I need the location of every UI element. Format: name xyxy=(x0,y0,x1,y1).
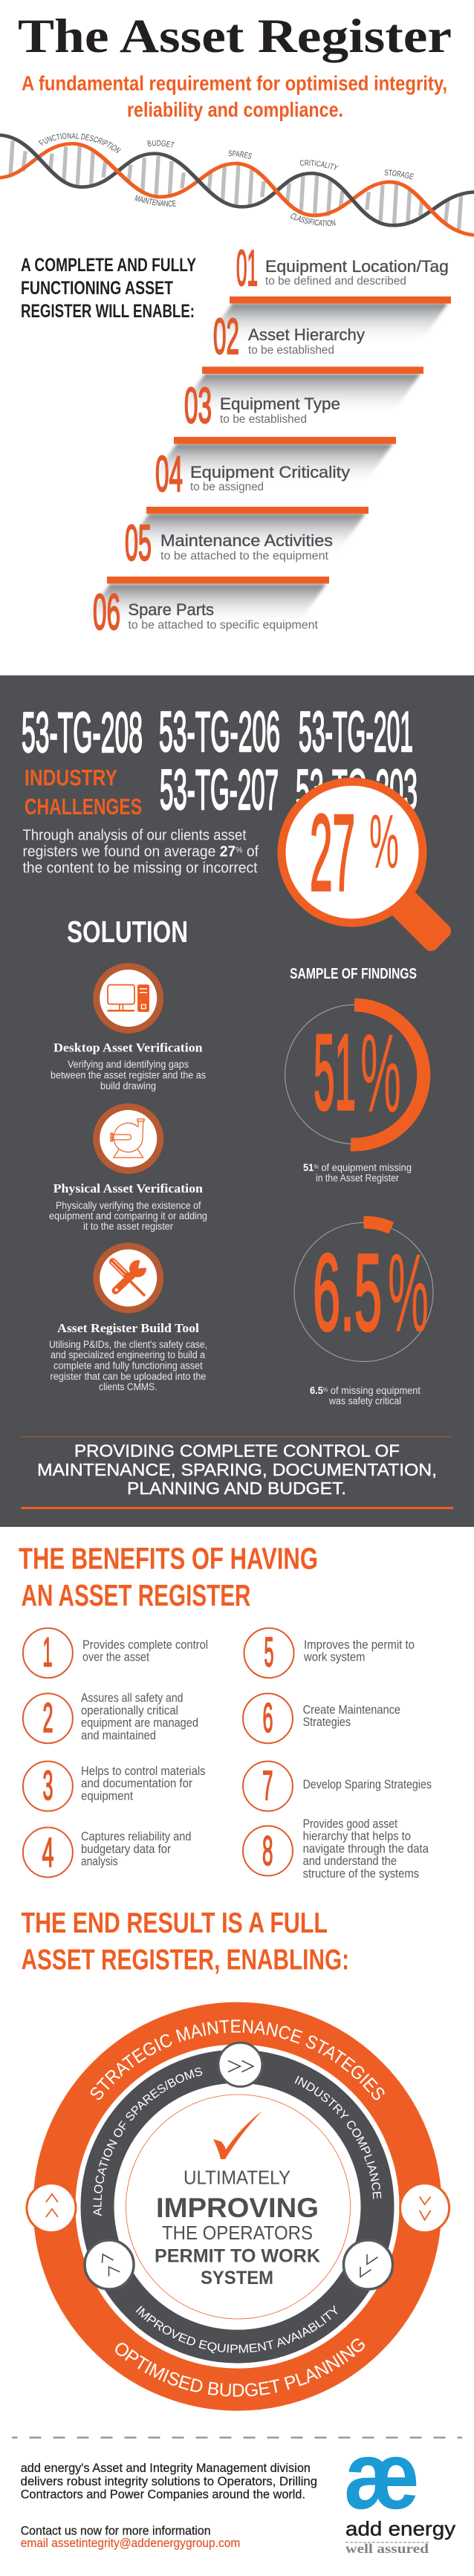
badge: top arrows xyxy=(218,2043,262,2086)
text: asset register build tool: and specialized engineering to build a xyxy=(51,1349,205,1361)
step 03: 03 xyxy=(184,377,212,434)
step 01: 01 xyxy=(236,240,258,296)
benefit 8: structure of the systems xyxy=(303,1866,419,1881)
DNA labels: CLASSIFICATION xyxy=(290,213,336,226)
title: The Asset Register xyxy=(18,10,452,63)
intro heading: A COMPLETE AND FULLY xyxy=(21,255,196,276)
step 05: Maintenance Activities xyxy=(160,531,333,550)
benefit 2: operationally critical xyxy=(81,1703,178,1718)
text: desktop asset verification: Verifying and identifying gaps xyxy=(68,1059,189,1071)
DNA labels: MAINTENANCE xyxy=(134,195,177,207)
benefit 4 xyxy=(23,1828,192,1877)
company description: add energy's Asset and Integrity Management division xyxy=(21,2462,311,2475)
caption: 51 percent: of equipment missing xyxy=(319,1162,412,1174)
benefit 6 xyxy=(243,1693,400,1743)
logo: add energy: æ xyxy=(344,2422,420,2529)
benefit 3: and documentation for xyxy=(81,1777,192,1791)
magnifying glass with 27%: 27 xyxy=(310,792,355,913)
challenge text: the content to be missing or incorrect xyxy=(22,860,258,877)
caption: 6.5 percent xyxy=(310,1385,421,1407)
badge: left arrows xyxy=(27,2184,76,2233)
benefit 4: budgetary data for xyxy=(81,1842,171,1856)
step 04: 04 xyxy=(155,446,183,502)
step 05: 05 xyxy=(125,515,152,571)
icon: wrench and screwdriver xyxy=(97,1246,160,1310)
benefit 5: 5 xyxy=(264,1629,273,1675)
challenge text: registers we found on average 27 xyxy=(22,843,237,860)
center statement: IMPROVING xyxy=(156,2193,319,2223)
chart: 51 percent ring: 51 xyxy=(314,1012,356,1132)
callout: complete control statement: PLANNING AND BUDGET. xyxy=(127,1479,346,1498)
DNA labels xyxy=(39,132,415,226)
challenge text: Through analysis of our clients asset xyxy=(22,827,247,844)
benefit 8: and understand the xyxy=(303,1854,397,1868)
asset tag numbers: 53-TG-208 xyxy=(22,701,143,765)
magnifying glass with 27%: % xyxy=(369,799,399,884)
benefits heading: AN ASSET REGISTER xyxy=(21,1578,251,1612)
chart: 51 percent ring: % xyxy=(360,1010,401,1135)
DNA labels: BUDGET xyxy=(147,140,175,148)
panel: dark challenges and solution xyxy=(0,675,474,1527)
DNA helix diagram xyxy=(0,132,474,237)
DNA labels: FUNCTIONAL DESCRIPTION xyxy=(39,132,122,153)
center statement xyxy=(155,2167,320,2288)
icon: check mark xyxy=(213,2111,262,2159)
text: physical asset verification: Physical Asset Verification xyxy=(53,1181,203,1195)
text: physical asset verification: it to the asset register xyxy=(83,1221,173,1233)
step 01: to be defined and described xyxy=(265,275,406,288)
benefit 5: work system xyxy=(303,1650,366,1664)
benefit 1: Provides complete control xyxy=(82,1638,208,1652)
text: asset register build tool: register that can be uploaded into the xyxy=(51,1371,207,1383)
step 06 xyxy=(93,584,319,640)
step 04 xyxy=(146,446,369,514)
intro heading: FUNCTIONING ASSET xyxy=(21,278,173,299)
DNA labels: CRITICALITY xyxy=(300,160,339,171)
industry challenges heading: INDUSTRY xyxy=(25,765,117,791)
callout: complete control statement: MAINTENANCE, SPARING, DOCUMENTATION, xyxy=(37,1460,437,1479)
step 02: to be established xyxy=(248,344,334,357)
caption: 6.5 percent: of missing equipment xyxy=(328,1385,421,1397)
benefit 3 xyxy=(23,1761,206,1811)
inner ring labels: INDUSTRY COMPLIANCE xyxy=(294,2076,382,2199)
chart: 51 percent ring xyxy=(285,1005,424,1144)
caption: 6.5 percent: % xyxy=(323,1386,328,1393)
icon: pump xyxy=(97,1107,160,1171)
benefit 8: navigate through the data xyxy=(303,1841,429,1855)
text: asset register build tool: clients CMMS. xyxy=(99,1381,158,1393)
subtitle xyxy=(22,72,447,121)
benefit 7: 7 xyxy=(262,1762,273,1808)
benefit 5 xyxy=(244,1628,415,1678)
caption: 51 percent: 51 xyxy=(303,1162,314,1174)
circular diagram xyxy=(25,2002,450,2411)
center statement: ULTIMATELY xyxy=(184,2167,290,2189)
step 02: 02 xyxy=(213,308,239,365)
center statement: THE OPERATORS xyxy=(162,2222,313,2244)
benefit 7 xyxy=(243,1761,432,1811)
text: asset register build tool: complete and fully functioning asset xyxy=(53,1360,203,1372)
DNA labels: SPARES xyxy=(229,150,252,159)
icon: desktop computer xyxy=(97,966,160,1030)
step 04: to be assigned xyxy=(190,481,264,493)
callout: complete control statement xyxy=(21,1436,453,1509)
text: physical asset verification: equipment and comparing it or adding xyxy=(49,1210,207,1222)
benefit 8: Provides good asset xyxy=(303,1817,397,1831)
center statement: SYSTEM xyxy=(201,2268,273,2288)
challenge text: of xyxy=(243,843,259,860)
step 01 xyxy=(230,240,451,303)
outer orange ring xyxy=(54,2023,421,2390)
benefit 2: equipment are managed xyxy=(81,1716,198,1730)
logo: add energy: add energy xyxy=(345,2518,456,2540)
challenge text xyxy=(22,827,259,877)
asset tag numbers xyxy=(22,701,418,822)
company description xyxy=(21,2462,317,2501)
company description: Contractors and Power Companies around the world. xyxy=(21,2488,305,2501)
benefits heading: THE BENEFITS OF HAVING xyxy=(19,1542,318,1576)
text: asset register build tool xyxy=(49,1321,207,1393)
asset tag numbers: 53-TG-206 xyxy=(159,701,280,764)
end result heading: ASSET REGISTER, ENABLING: xyxy=(21,1944,349,1976)
logo: add energy xyxy=(344,2422,456,2556)
inner ring labels: ALLOCATION OF SPARES/BOMS xyxy=(93,2067,202,2216)
inner ring labels: IMPROVED EQUIPMENT AVAIABLITY xyxy=(135,2305,337,2354)
contact details: email assetintegrity@addenergygroup.com xyxy=(21,2537,240,2550)
solution heading: SOLUTION xyxy=(67,915,188,949)
benefit 8 xyxy=(243,1817,429,1881)
text: asset register build tool: Utilising P&IDs, the client's safety case, xyxy=(49,1339,207,1351)
benefits heading xyxy=(19,1542,318,1612)
step 03: to be established xyxy=(220,413,307,426)
caption: 51 percent xyxy=(303,1162,412,1184)
company description: delivers robust integrity solutions to Operators, Drilling xyxy=(21,2475,317,2488)
caption: 51 percent: in the Asset Register xyxy=(316,1172,399,1184)
caption: 6.5 percent: was safety critical xyxy=(328,1395,401,1407)
center statement: PERMIT TO WORK xyxy=(155,2245,320,2266)
dark inner ring xyxy=(97,2066,377,2346)
benefit 2: 2 xyxy=(43,1694,53,1741)
outer ring labels xyxy=(91,2019,385,2397)
inner ring labels xyxy=(93,2067,382,2354)
outer ring labels: STRATEGIC MAINTENANCE STATEGIES xyxy=(91,2019,385,2100)
benefit 6: 6 xyxy=(263,1694,273,1741)
benefit 7: Develop Sparing Strategies xyxy=(303,1777,432,1791)
challenge text: % xyxy=(236,846,243,855)
text: desktop asset verification: between the asset register and the as xyxy=(51,1070,206,1082)
intro heading: REGISTER WILL ENABLE: xyxy=(21,301,195,322)
center disc xyxy=(126,2095,351,2319)
text: physical asset verification: Physically verifying the existence of xyxy=(56,1200,201,1212)
benefit 4: analysis xyxy=(81,1855,118,1869)
text: desktop asset verification: build drawing xyxy=(100,1080,156,1092)
step 05 xyxy=(107,515,333,584)
benefit 3: Helps to control materials xyxy=(81,1764,206,1778)
sample of findings heading: SAMPLE OF FINDINGS xyxy=(290,966,417,982)
step shadows xyxy=(80,303,448,626)
benefit 1: over the asset xyxy=(82,1650,149,1664)
step 06: 06 xyxy=(93,584,120,640)
contact details xyxy=(21,2525,240,2550)
benefit 2: Assures all safety and xyxy=(81,1691,183,1705)
benefit 2 xyxy=(23,1691,198,1743)
benefit 3: 3 xyxy=(43,1762,53,1808)
contact details: Contact us now for more information xyxy=(21,2525,211,2538)
DNA labels: STORAGE xyxy=(385,169,415,180)
benefit 4: 4 xyxy=(42,1829,53,1875)
magnifying glass with 27% xyxy=(282,782,454,954)
benefit 4: Captures reliability and xyxy=(81,1829,192,1843)
benefit 3: equipment xyxy=(81,1789,133,1803)
step 02 xyxy=(202,308,423,374)
text: physical asset verification xyxy=(49,1181,207,1233)
step 04: Equipment Criticality xyxy=(190,463,350,481)
callout: complete control statement: PROVIDING COMPLETE CONTROL OF xyxy=(74,1441,400,1461)
benefit 6: Strategies xyxy=(303,1715,351,1729)
benefit 2: and maintained xyxy=(81,1728,156,1742)
industry challenges heading xyxy=(25,765,142,820)
benefit 5: Improves the permit to xyxy=(304,1638,415,1652)
step 02: Asset Hierarchy xyxy=(248,325,365,344)
subtitle: reliability and compliance. xyxy=(127,98,343,121)
text: desktop asset verification: Desktop Asset Verification xyxy=(53,1041,203,1055)
benefit 6: Create Maintenance xyxy=(303,1703,400,1717)
caption: 51 percent: % xyxy=(314,1164,319,1170)
intro heading xyxy=(21,255,196,322)
benefit 1: 1 xyxy=(43,1629,52,1675)
benefit 8: 8 xyxy=(262,1827,273,1874)
DNA rungs xyxy=(10,140,461,230)
footer divider xyxy=(12,2436,462,2439)
benefit 8: hierarchy that helps to xyxy=(303,1829,411,1843)
text: asset register build tool: Asset Register Build Tool xyxy=(57,1321,199,1335)
DNA strands xyxy=(0,135,474,236)
step 03 xyxy=(174,377,396,444)
chart: 6.5 percent ring xyxy=(294,1222,433,1361)
caption: 6.5 percent: 6.5 xyxy=(310,1385,323,1397)
step 06: to be attached to specific equipment xyxy=(128,619,319,632)
end result heading: THE END RESULT IS A FULL xyxy=(21,1907,328,1939)
badge: lower left arrows xyxy=(85,2240,134,2289)
end result heading xyxy=(21,1907,349,1976)
logo: add energy: well assured xyxy=(345,2541,429,2556)
chart: 6.5 percent ring: 6.5 xyxy=(313,1232,382,1354)
step 03: Equipment Type xyxy=(220,395,340,413)
industry challenges heading: CHALLENGES xyxy=(25,794,142,820)
text: desktop asset verification xyxy=(51,1041,206,1092)
badge: right arrows xyxy=(400,2184,449,2233)
step 01: Equipment Location/Tag xyxy=(265,257,449,276)
badge: lower right arrows xyxy=(343,2240,392,2289)
step 06: Spare Parts xyxy=(128,600,214,619)
asset tag numbers: 53-TG-207 xyxy=(160,759,279,822)
step 05: to be attached to the equipment xyxy=(160,550,329,562)
outer ring labels: OPTIMISED BUDGET PLANNING xyxy=(115,2339,365,2397)
benefit 1 xyxy=(23,1628,208,1678)
